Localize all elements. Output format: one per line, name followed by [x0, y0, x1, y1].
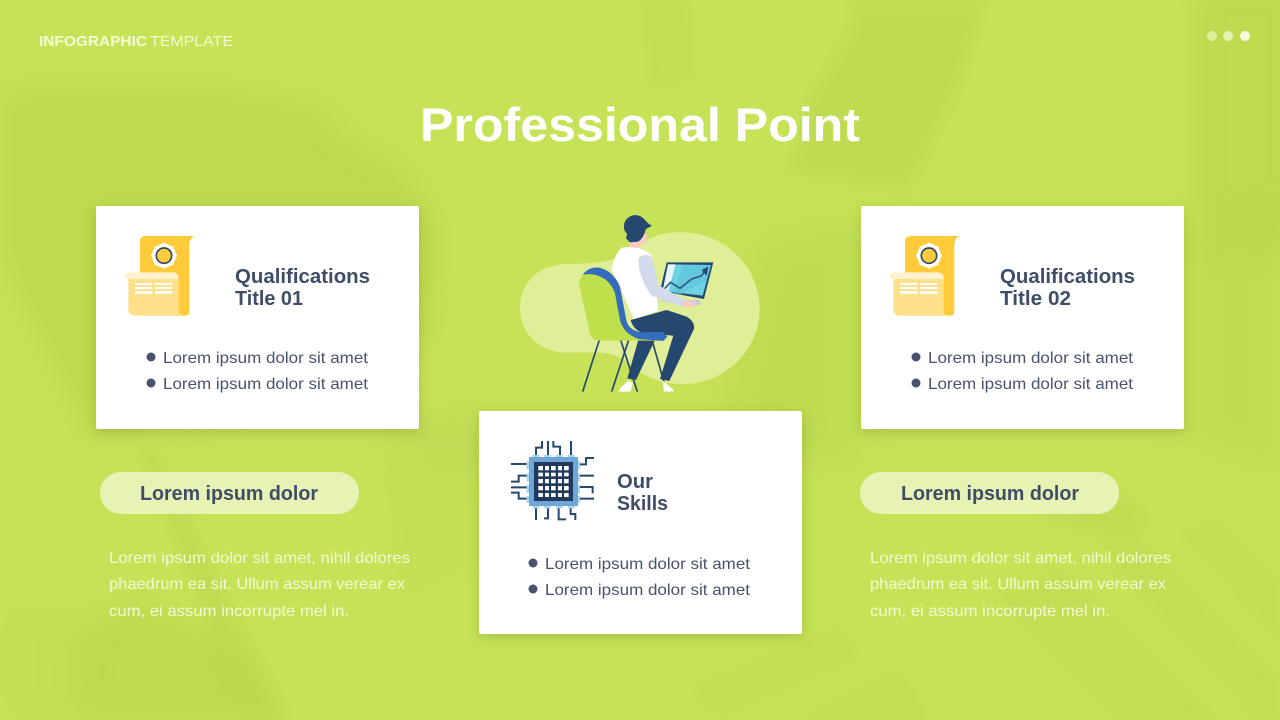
- text block right: phaedrum ea sit. Ullum assum verear ex: [870, 576, 1166, 593]
- bullet list: Lorem ipsum dolor sit amet: [163, 350, 369, 367]
- bullet list: [912, 350, 1134, 393]
- text block right: [870, 550, 1171, 620]
- text block left: Lorem ipsum dolor sit amet, nihil dolores: [109, 550, 410, 567]
- text block left: phaedrum ea sit. Ullum assum verear ex: [109, 576, 405, 593]
- arm: [638, 255, 685, 307]
- pill label right: [860, 472, 1119, 514]
- header label: [39, 33, 233, 50]
- panel: qualifications 01: [96, 206, 419, 429]
- bullet list: Lorem ipsum dolor sit amet: [545, 582, 751, 599]
- blob backdrop: [520, 232, 760, 384]
- bullet list: [528, 556, 751, 599]
- pill label left: Lorem ipsum dolor: [140, 483, 318, 505]
- bullet list: Lorem ipsum dolor sit amet: [163, 376, 369, 393]
- panel: our skills: [479, 411, 802, 634]
- text block left: cum, ei assum incorrupte mel in.: [109, 603, 349, 620]
- pagination dots: [1207, 31, 1250, 41]
- panel heading: Title 01: [235, 288, 303, 310]
- title: Professional Point: [420, 98, 860, 151]
- panel: qualifications 02: [861, 206, 1184, 429]
- text block right: Lorem ipsum dolor sit amet, nihil dolores: [870, 550, 1171, 567]
- laptop: [657, 262, 713, 305]
- bullet list: Lorem ipsum dolor sit amet: [545, 556, 751, 573]
- panel heading: Qualifications: [235, 266, 370, 288]
- bullet list: Lorem ipsum dolor sit amet: [928, 376, 1134, 393]
- icon: circuit chip: [511, 441, 594, 520]
- shoes: [618, 380, 633, 392]
- head hair: [624, 215, 652, 242]
- bullet list: Lorem ipsum dolor sit amet: [928, 350, 1134, 367]
- neck: [629, 233, 647, 248]
- header label: INFOGRAPHIC: [39, 33, 147, 50]
- header label: TEMPLATE: [150, 33, 233, 50]
- panel heading: Title 02: [1000, 288, 1071, 310]
- icon: document with gear: [124, 236, 196, 316]
- chair seat: [579, 273, 658, 341]
- panel heading: [1000, 266, 1135, 310]
- chair back rim: [583, 268, 667, 341]
- panel heading: [617, 471, 668, 515]
- panel heading: [235, 266, 370, 310]
- pill label right: Lorem ipsum dolor: [901, 483, 1079, 505]
- panel heading: Our: [617, 471, 653, 493]
- panel heading: Qualifications: [1000, 266, 1135, 288]
- torso: [612, 247, 658, 319]
- rear leg: [627, 340, 655, 380]
- panel heading: Skills: [617, 493, 668, 515]
- bullet list: [146, 350, 369, 393]
- icon: document with gear: [889, 236, 961, 316]
- pill label left: [100, 472, 359, 514]
- text block left: [109, 550, 410, 620]
- text block right: cum, ei assum incorrupte mel in.: [870, 603, 1110, 620]
- illustration: person at laptop on chair: [520, 215, 760, 392]
- chair legs: [583, 340, 667, 392]
- hand: [683, 301, 697, 307]
- thigh leg: [631, 310, 694, 381]
